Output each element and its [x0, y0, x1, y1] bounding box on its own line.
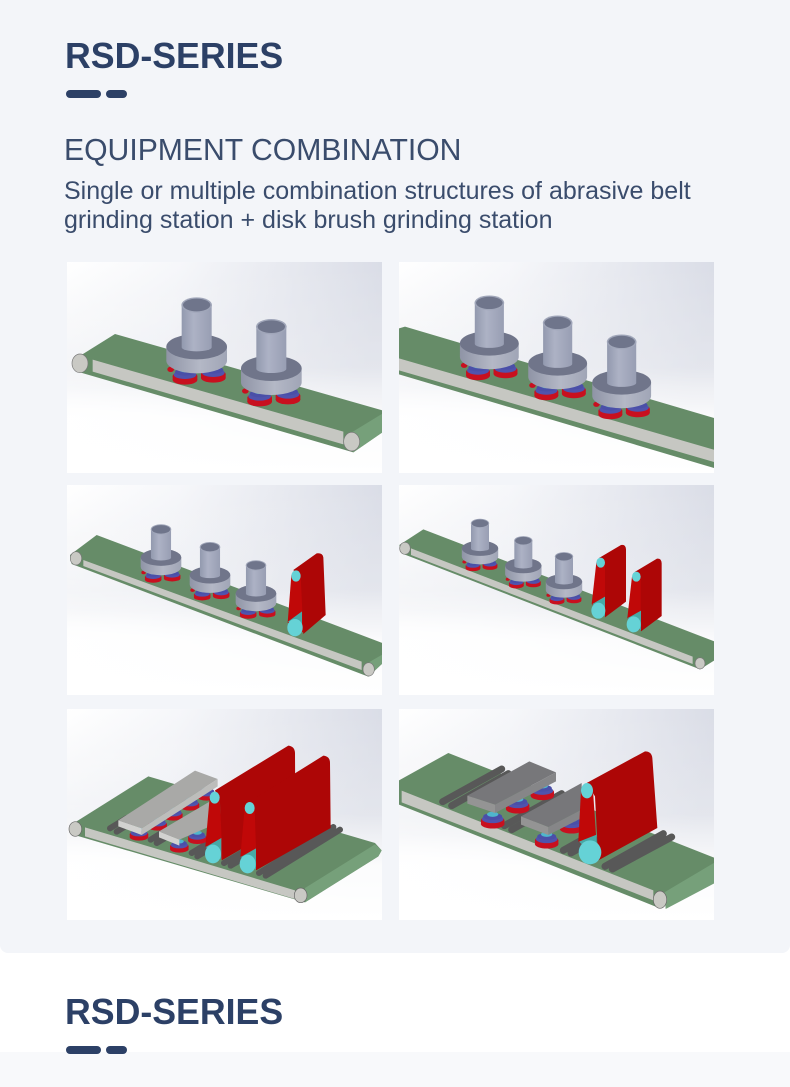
illustration: double row brushes with one wide belt station: [399, 709, 714, 920]
illustration: double row brushes with two wide belt stations: [67, 709, 382, 920]
description text: Single or multiple combination structures of abrasive belt: [64, 177, 691, 205]
heading: RSD-SERIES: RSD-SERIES: [65, 36, 283, 76]
illustration: three disk brush stations and two belt stations: [399, 485, 714, 695]
bottom strip background: [0, 1052, 790, 1087]
illustration: three disk brush stations on conveyor: [399, 262, 714, 473]
description text: grinding station + disk brush grinding station: [64, 206, 552, 234]
section title: EQUIPMENT COMBINATION: [64, 134, 461, 167]
heading: RSD-SERIES (second): RSD-SERIES: [65, 992, 283, 1032]
second heading accent bars: [66, 1046, 127, 1054]
illustration: two disk brush stations on conveyor: [67, 262, 382, 473]
heading accent bars: [66, 90, 127, 98]
description text: [64, 177, 691, 234]
illustration: three disk brush stations and one belt station: [67, 485, 382, 695]
